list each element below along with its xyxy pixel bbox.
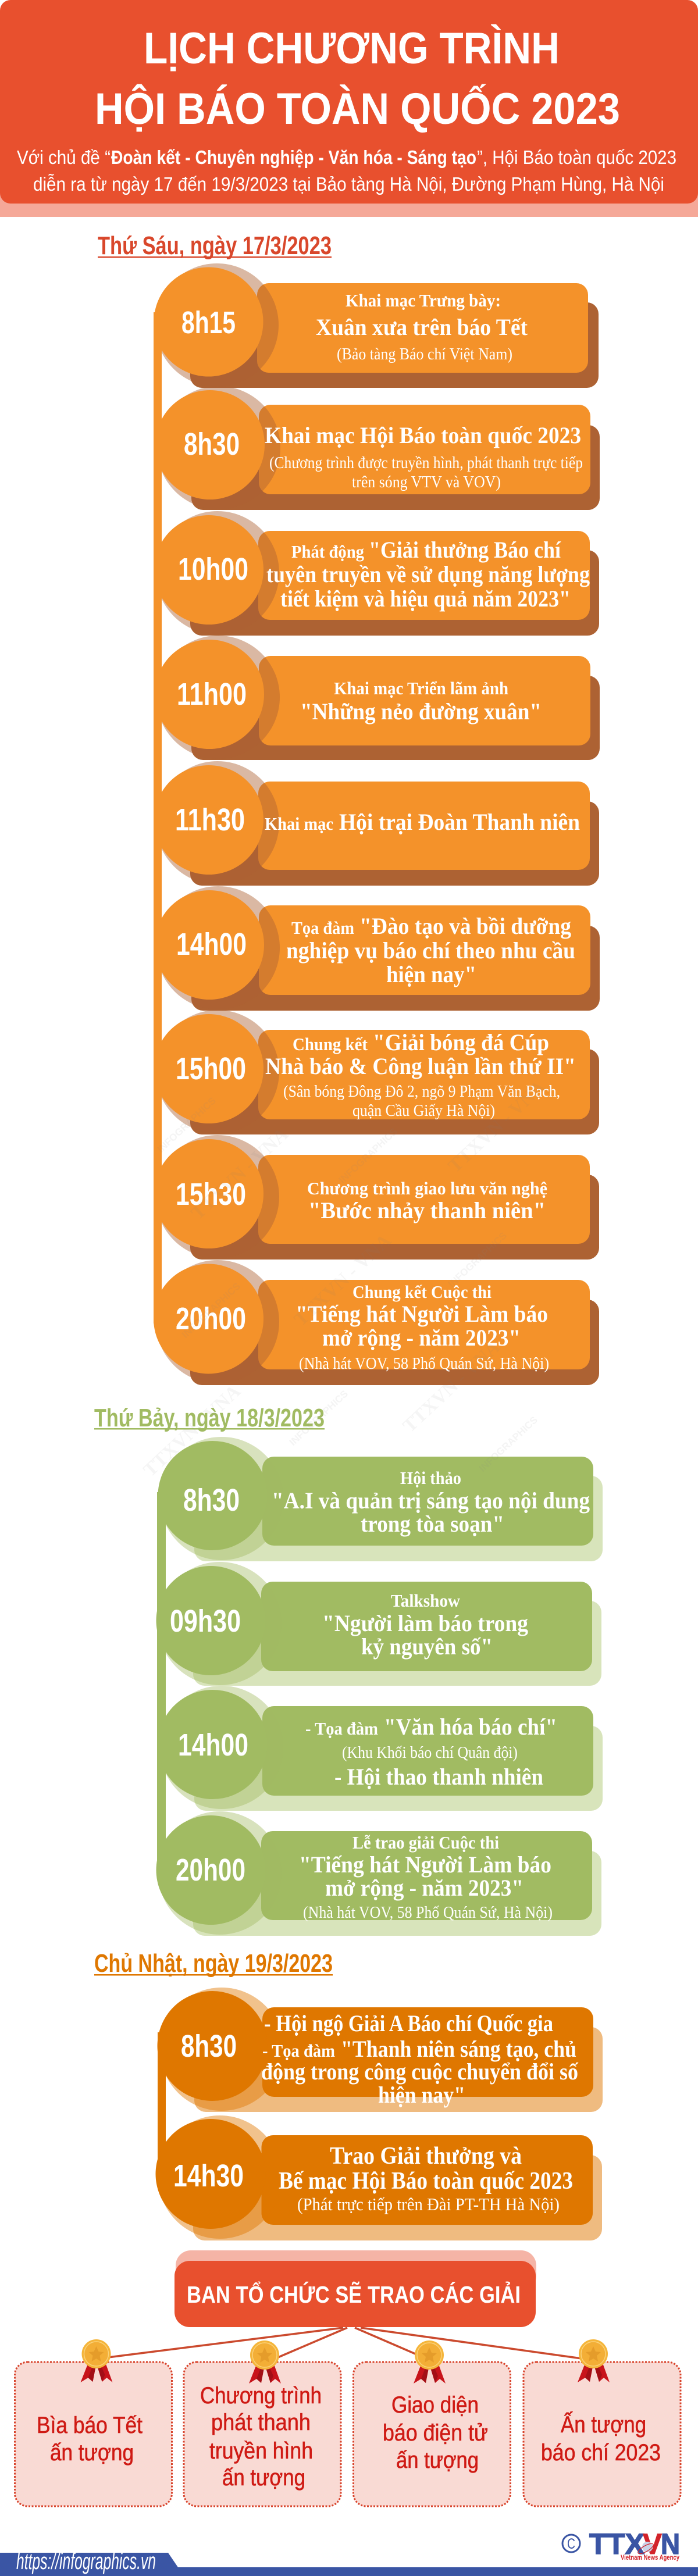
- item 10h00: tuyên truyền về sử dụng năng lượng: [266, 561, 590, 587]
- subtitle: Đoàn kết - Chuyên nghiệp - Văn hóa - Sáng tạo: [111, 147, 476, 168]
- item 8h30: [158, 1437, 603, 1561]
- item 15h30: "Bước nhảy thanh niên": [308, 1197, 546, 1223]
- award card: Ấn tượng báo chí 2023: [524, 2339, 681, 2506]
- heading: Friday: Thứ Sáu, ngày 17/3/2023: [98, 231, 332, 260]
- item 14h00: - Tọa đàm: [305, 1718, 378, 1739]
- item 8h15: [154, 263, 599, 388]
- item 14h00: nghiệp vụ báo chí theo nhu cầu: [286, 937, 575, 964]
- award card: Ấn tượng báo chí 2023: Ấn tượng: [561, 2411, 646, 2438]
- item 8h30: "Thanh niên sáng tạo, chủ: [341, 2036, 576, 2062]
- watermarks: TTXVN - VNA: [444, 1077, 550, 1177]
- award card: Giao diện báo điện tử ấn tượng: Giao diện: [391, 2392, 479, 2418]
- item 14h30: Bế mạc Hội Báo toàn quốc 2023: [279, 2168, 573, 2195]
- award card: Chương trình phát thanh truyền hình ấn tượng: truyền hình: [209, 2438, 313, 2464]
- watermarks: INFOGRAPHICS: [337, 1126, 400, 1186]
- item 20h00: Chung kết Cuộc thi: [352, 1282, 492, 1302]
- item 8h15: (Bảo tàng Báo chí Việt Nam): [337, 345, 512, 363]
- item 20h00: "Tiếng hát Người Làm báo: [295, 1301, 548, 1327]
- item 11h30: Hội trại Đoàn Thanh niên: [339, 809, 580, 835]
- item 14h00: 14h00: [178, 1728, 248, 1762]
- item 20h00: (Nhà hát VOV, 58 Phố Quán Sứ, Hà Nội): [303, 1904, 553, 1922]
- award card: Chương trình phát thanh truyền hình ấn tượng: Chương trình: [200, 2383, 322, 2409]
- item 11h00: Khai mạc Triển lãm ảnh: [334, 678, 508, 698]
- item 09h30: 09h30: [170, 1604, 241, 1639]
- award card: Chương trình phát thanh truyền hình ấn tượng: phát thanh: [211, 2410, 311, 2435]
- logo: TTXVN: N: [661, 2528, 680, 2560]
- item 15h00: "Giải bóng đá Cúp: [373, 1029, 549, 1055]
- Sunday schedule: [156, 1988, 603, 2240]
- item 20h00: 20h00: [176, 1853, 245, 1888]
- item 11h30: [154, 761, 599, 886]
- item 8h30: Hội thảo: [400, 1468, 461, 1488]
- item 8h15: Khai mạc Trưng bày:: [346, 290, 501, 311]
- logo: TTXVN: V: [643, 2528, 663, 2560]
- item 14h00: (Khu Khối báo chí Quân đội): [342, 1744, 518, 1762]
- item 14h30: Trao Giải thưởng và: [330, 2143, 522, 2170]
- watermarks: TTXVN - VNA: [187, 1124, 293, 1224]
- watermarks: TTXVN - VNA: [399, 1337, 504, 1437]
- item 10h00: "Giải thưởng Báo chí: [369, 537, 561, 563]
- subtitle: ”, Hội Báo toàn quốc 2023: [477, 147, 676, 168]
- item 09h30: [156, 1492, 601, 1876]
- subtitle: Với chủ đề “: [17, 147, 111, 168]
- award card: Bìa báo Tết ấn tượng: Bìa báo Tết: [37, 2413, 143, 2438]
- item 11h30: 11h30: [175, 802, 245, 837]
- watermarks: INFOGRAPHICS: [180, 1280, 243, 1340]
- icon: medal: [578, 2339, 610, 2382]
- item 15h00: quận Cầu Giấy Hà Nội): [352, 1102, 495, 1120]
- item 15h00: Nhà báo & Công luận lần thứ II": [265, 1053, 576, 1079]
- item 8h30: [157, 1988, 603, 2178]
- item 14h00: Tọa đàm: [291, 918, 354, 938]
- award card: Giao diện báo điện tử ấn tượng: ấn tượng: [396, 2447, 479, 2473]
- item 8h30: 8h30: [181, 2029, 237, 2064]
- watermarks: TTXVN - VNA: [290, 1230, 396, 1330]
- item 11h30: Khai mạc: [265, 814, 333, 834]
- watermarks: INFOGRAPHICS: [155, 1095, 218, 1155]
- item 14h00: "Văn hóa báo chí": [384, 1714, 557, 1740]
- item 10h00: Phát động: [291, 541, 364, 562]
- footer bar: [0, 2549, 698, 2576]
- item 11h00: [155, 636, 600, 760]
- header banner: [0, 0, 698, 217]
- item 14h30: (Phát trực tiếp trên Đài PT-TH Hà Nội): [297, 2194, 560, 2214]
- footer bar: https://infographics.vn: [16, 2549, 156, 2574]
- item 8h30: động trong công cuộc chuyển đổi số: [261, 2058, 579, 2085]
- item 8h30: [155, 386, 600, 510]
- item 20h00: mở rộng - năm 2023": [325, 1875, 524, 1901]
- item 8h30: Khai mạc Hội Báo toàn quốc 2023: [265, 422, 581, 448]
- item 8h30: "A.I và quản trị sáng tạo nội dung: [272, 1487, 590, 1514]
- award card: Giao diện báo điện tử ấn tượng: báo điện tử: [383, 2420, 488, 2446]
- item 8h30: 8h30: [183, 1483, 240, 1518]
- title: LỊCH CHƯƠNG TRÌNH: [144, 24, 560, 73]
- item 15h30: 15h30: [176, 1177, 246, 1212]
- organizer banner: [174, 2250, 536, 2327]
- item 10h00: 10h00: [178, 552, 248, 587]
- icon: medal: [249, 2340, 281, 2384]
- item 20h00: [154, 312, 599, 1385]
- item 14h30: [156, 2115, 602, 2240]
- heading: Sunday: Chủ Nhật, ngày 19/3/2023: [94, 1949, 333, 1978]
- award card: Ấn tượng báo chí 2023: báo chí 2023: [541, 2440, 661, 2466]
- item 14h00: hiện nay": [386, 961, 476, 987]
- award card: Giao diện báo điện tử ấn tượng: [354, 2340, 511, 2506]
- item 20h00: [156, 1811, 601, 1936]
- watermarks: INFOGRAPHICS: [477, 1414, 540, 1474]
- item 14h00: "Đào tạo và bồi dưỡng: [359, 913, 571, 939]
- item 14h00: [158, 1686, 603, 1811]
- item 14h00: - Hội thao thanh nhiên: [334, 1764, 543, 1790]
- logo: TTXVN: [562, 2528, 680, 2561]
- watermarks: TTXVN - VNA: [140, 1381, 245, 1481]
- title: HỘI BÁO TOÀN QUỐC 2023: [95, 84, 620, 134]
- award card: Chương trình phát thanh truyền hình ấn tượng: [184, 2340, 341, 2506]
- item 20h00: mở rộng - năm 2023": [322, 1325, 521, 1351]
- item 20h00: Lễ trao giải Cuộc thi: [352, 1832, 499, 1853]
- logo: TTXVN: TTX: [589, 2528, 644, 2560]
- watermarks: INFOGRAPHICS: [287, 1388, 350, 1448]
- item 8h15: Xuân xưa trên báo Tết: [316, 314, 528, 340]
- item 15h30: Chương trình giao lưu văn nghệ: [307, 1178, 547, 1198]
- heading: Saturday: Thứ Bảy, ngày 18/3/2023: [94, 1404, 325, 1432]
- item 8h30: - Hội ngộ Giải A Báo chí Quốc gia: [264, 2010, 553, 2036]
- item 15h00: Chung kết: [293, 1034, 368, 1054]
- item 15h30: [154, 1135, 599, 1260]
- item 20h00: (Nhà hát VOV, 58 Phố Quán Sứ, Hà Nội): [299, 1355, 549, 1373]
- award card: Chương trình phát thanh truyền hình ấn tượng: ấn tượng: [222, 2465, 305, 2491]
- watermarks: INFOGRAPHICS: [446, 1230, 509, 1290]
- item 11h00: 11h00: [177, 677, 247, 712]
- item 10h00: [154, 511, 599, 636]
- item 20h00: 20h00: [176, 1301, 246, 1336]
- item 8h30: (Chương trình được truyền hình, phát thanh trực tiếp: [269, 454, 583, 472]
- item 8h30: - Tọa đàm: [262, 2040, 335, 2061]
- organizer banner: BAN TỔ CHỨC SẼ TRAO CÁC GIẢI: [187, 2281, 521, 2308]
- item 20h00: "Tiếng hát Người Làm báo: [299, 1851, 551, 1878]
- logo: TTXVN: Vietnam News Agency: [621, 2553, 679, 2561]
- item 8h30: trong tòa soạn": [361, 1511, 504, 1537]
- icon: medal: [414, 2340, 446, 2384]
- Saturday schedule: [156, 1437, 603, 1936]
- item 10h00: tiết kiệm và hiệu quả năm 2023": [280, 586, 571, 612]
- item 09h30: Talkshow: [391, 1590, 461, 1611]
- connector lines: [108, 2328, 582, 2359]
- award card: Bìa báo Tết ấn tượng: [15, 2339, 172, 2506]
- item 11h00: "Những nẻo đường xuân": [300, 698, 542, 725]
- item 09h30: kỷ nguyên số": [361, 1633, 493, 1660]
- item 15h00: [154, 1010, 599, 1134]
- logo: TTXVN: C: [567, 2536, 575, 2552]
- icon: medal: [80, 2339, 113, 2382]
- item 09h30: "Người làm báo trong: [322, 1610, 528, 1636]
- item 14h00: [155, 886, 600, 1011]
- item 14h30: 14h30: [173, 2158, 244, 2193]
- item 14h00: 14h00: [176, 927, 247, 962]
- watermarks: [140, 1077, 550, 1481]
- Friday schedule: [154, 263, 600, 1385]
- title: [95, 24, 620, 134]
- item 8h30: trên sóng VTV và VOV): [352, 473, 501, 491]
- item 15h00: 15h00: [176, 1051, 246, 1086]
- item 8h30: hiện nay": [378, 2082, 465, 2108]
- subtitle: [17, 147, 676, 195]
- item 8h30: 8h30: [184, 427, 240, 462]
- award card: Bìa báo Tết ấn tượng: ấn tượng: [50, 2440, 134, 2466]
- item 8h15: 8h15: [181, 305, 236, 340]
- item 15h00: (Sân bóng Đông Đô 2, ngõ 9 Phạm Văn Bạch,: [283, 1083, 560, 1101]
